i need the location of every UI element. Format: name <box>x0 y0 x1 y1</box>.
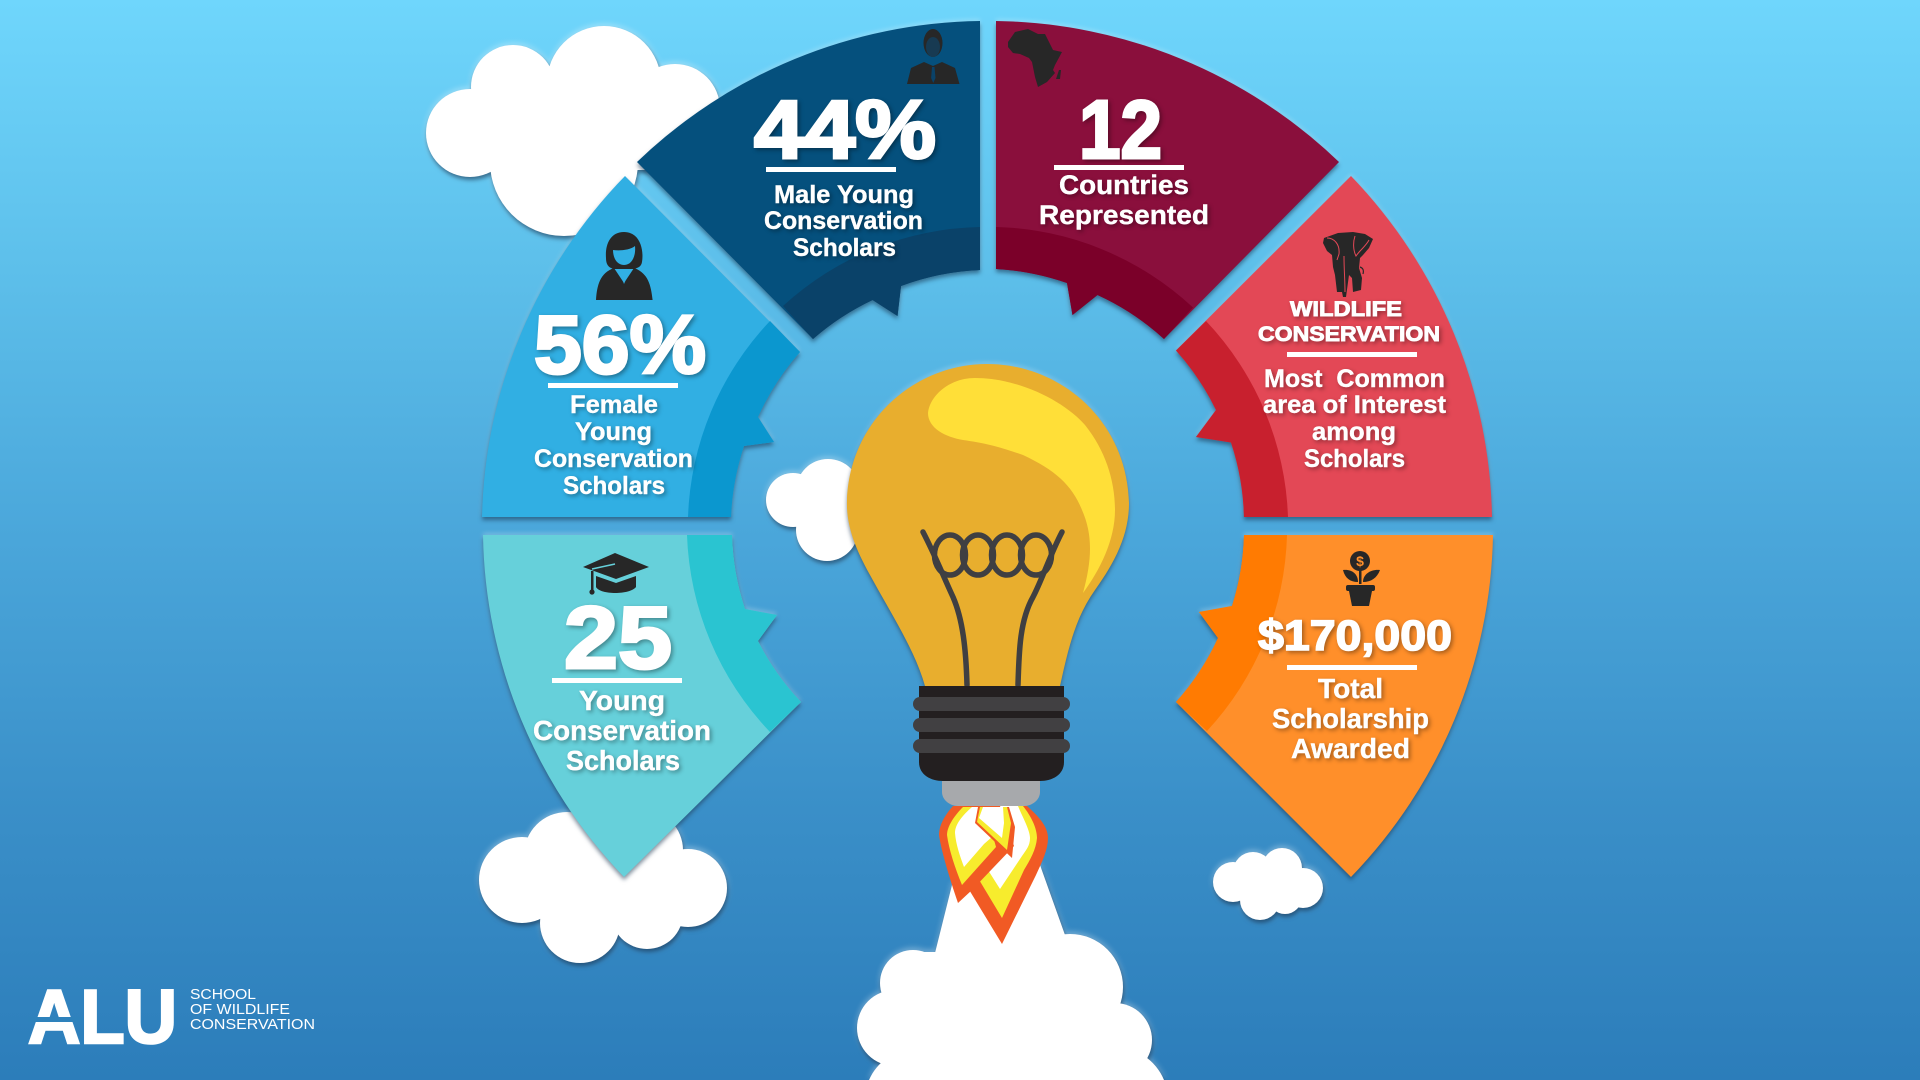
icon: businessman <box>907 29 960 84</box>
label: most common area of interest: area of Interest <box>1263 391 1447 419</box>
label: total scholarship awarded: Total <box>1318 673 1383 704</box>
label: female young conservation scholars: Scholars <box>563 472 665 500</box>
heading: wildlife conservation <box>1258 298 1440 346</box>
icon: businesswoman <box>596 232 653 300</box>
panel: male scholars <box>637 21 980 339</box>
label: male young conservation scholars: Male Young <box>774 181 914 209</box>
logo text <box>190 987 315 1033</box>
maroon segment shape <box>996 21 1339 339</box>
label: female young conservation scholars: Female <box>570 391 658 419</box>
underline <box>1287 665 1417 670</box>
label: total scholarship awarded <box>1272 673 1429 764</box>
screw base <box>919 686 1064 781</box>
rocket smoke cloud <box>857 865 1164 1080</box>
cloud: bottom left <box>479 810 727 963</box>
underline <box>766 167 896 172</box>
icon: africa map <box>1008 29 1062 87</box>
cloud: small right <box>1213 848 1323 920</box>
logo: ALU School of Wildlife Conservation <box>28 975 315 1060</box>
panel: scholarship awarded <box>1176 535 1493 877</box>
logo mark: ALU <box>28 975 177 1060</box>
label: total scholarship awarded: Awarded <box>1291 733 1410 764</box>
panel: total scholars <box>483 535 801 877</box>
stat: 12: 12 <box>1079 83 1162 176</box>
red segment shape <box>1176 176 1492 517</box>
label: young conservation scholars: Young <box>579 685 665 716</box>
illustration: rocket flames <box>939 806 1048 944</box>
label: most common area of interest: Scholars <box>1304 445 1405 473</box>
label: male young conservation scholars <box>764 181 923 262</box>
label: female young conservation scholars <box>534 391 693 500</box>
teal segment shape <box>483 535 801 877</box>
label: most common area of interest: among <box>1312 418 1396 446</box>
heading: wildlife conservation: CONSERVATION <box>1258 323 1440 346</box>
logo text: OF WILDLIFE <box>190 1002 290 1018</box>
label: countries represented: Countries <box>1059 170 1189 200</box>
stat: 56%: 56% <box>534 298 706 391</box>
icon: money plant <box>1343 551 1380 606</box>
cloud: top left <box>426 26 720 236</box>
bulb glass <box>847 364 1129 686</box>
label: young conservation scholars: Scholars <box>566 745 680 776</box>
panel: female scholars <box>482 176 800 517</box>
stat: 44%: 44% <box>754 83 936 176</box>
base tip <box>942 781 1040 806</box>
label: most common area of interest <box>1263 365 1447 473</box>
label: male young conservation scholars: Conservation <box>764 207 923 235</box>
cloud: behind bulb <box>766 459 892 561</box>
icon: elephant <box>1323 232 1373 297</box>
label: most common area of interest: Most Common <box>1264 365 1445 393</box>
label: female young conservation scholars: Young <box>575 418 652 446</box>
heading: wildlife conservation: WILDLIFE <box>1290 298 1402 321</box>
illustration: light bulb <box>847 364 1129 806</box>
icon: money plant: $ <box>1356 553 1364 569</box>
orange segment shape <box>1176 535 1493 877</box>
logo text: SCHOOL <box>190 987 256 1003</box>
logo text: CONSERVATION <box>190 1017 315 1033</box>
underline <box>1054 165 1184 170</box>
label: countries represented: Represented <box>1039 200 1209 230</box>
label: female young conservation scholars: Conservation <box>534 445 693 473</box>
panel: countries <box>996 21 1339 339</box>
icon: graduation cap <box>583 553 649 595</box>
label: young conservation scholars: Conservation <box>533 715 711 746</box>
panel: wildlife conservation <box>1176 176 1492 517</box>
label: total scholarship awarded: Scholarship <box>1272 703 1429 734</box>
stat: 25: 25 <box>564 588 672 687</box>
underline <box>552 678 682 683</box>
bulb highlight <box>928 378 1115 593</box>
blue segment shape <box>482 176 800 517</box>
stat: $170,000: $170,000 <box>1258 612 1452 660</box>
label: male young conservation scholars: Scholars <box>793 234 896 262</box>
filament <box>923 532 1062 685</box>
navy segment shape <box>637 21 980 339</box>
label: countries represented <box>1039 170 1209 230</box>
underline <box>1287 352 1417 357</box>
label: young conservation scholars <box>533 685 711 776</box>
underline <box>548 383 678 388</box>
